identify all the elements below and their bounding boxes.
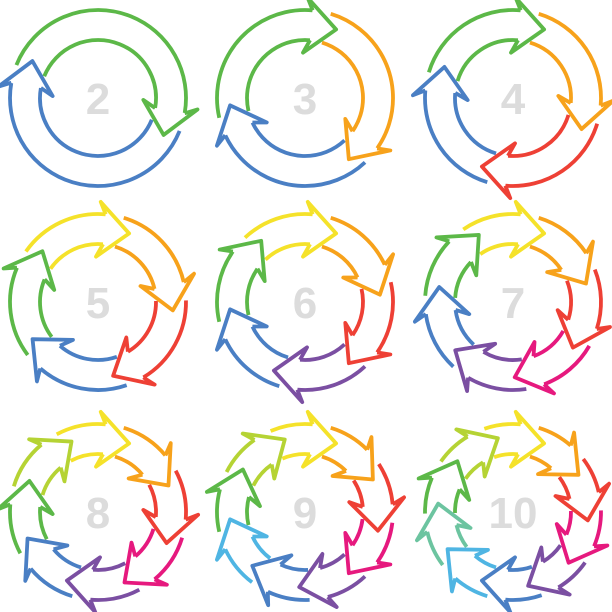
- diagram: 7 arrows: 7: [501, 279, 525, 328]
- diagram: 2 arrows: [0, 0, 213, 213]
- diagram: 6 arrows: [181, 178, 429, 426]
- diagram: 4 arrows: 4: [501, 75, 526, 124]
- diagram: 9 arrows: [181, 388, 429, 612]
- diagram: 10 arrows: [390, 389, 612, 612]
- diagram: 6 arrows: 6: [293, 279, 317, 328]
- diagram: 3 arrows: 3: [293, 75, 317, 124]
- diagram: 3 arrows: [181, 0, 429, 222]
- diagram: 5 arrows: 5: [86, 279, 110, 328]
- diagram: 4 arrows: [403, 0, 612, 208]
- diagram: 7 arrows: [389, 178, 612, 426]
- diagram: 2 arrows: 2: [86, 75, 110, 124]
- diagram: 5 arrows: [0, 179, 221, 425]
- diagram: 10 arrows: 10: [489, 489, 537, 538]
- diagram: 8 arrows: 8: [86, 489, 110, 538]
- diagram: 9 arrows: 9: [293, 489, 317, 538]
- diagram: 8 arrows: [0, 393, 217, 612]
